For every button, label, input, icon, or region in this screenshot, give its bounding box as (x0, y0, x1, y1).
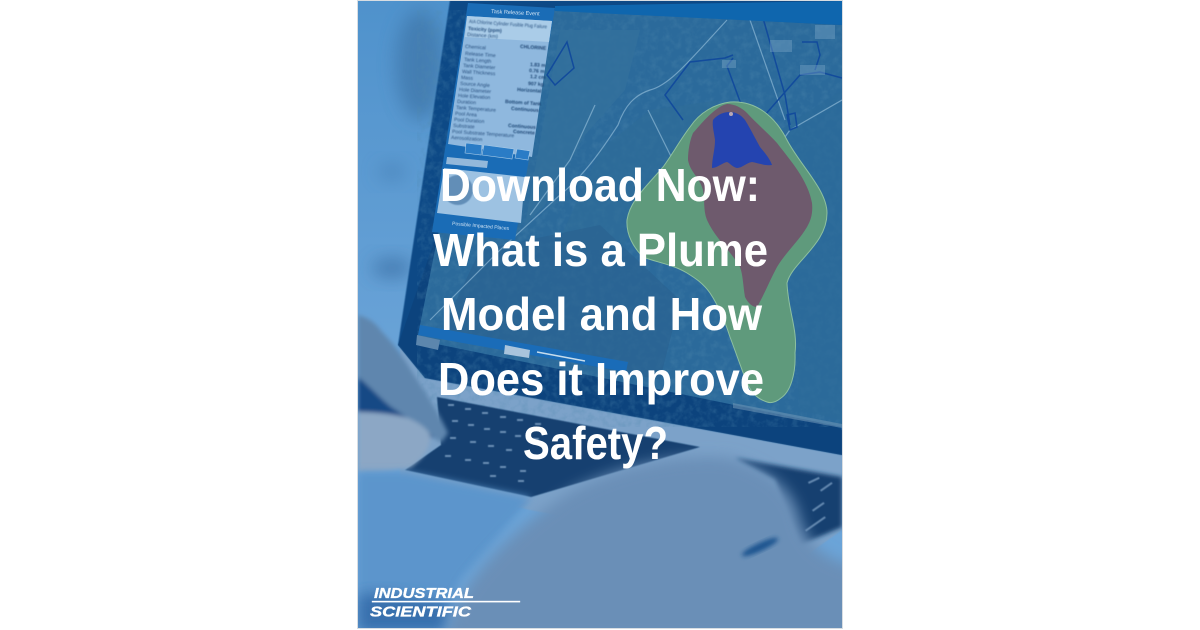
keyboard left keys (445, 404, 541, 482)
plume: outer green zone (627, 102, 827, 403)
blurred background (358, 1, 842, 628)
map (417, 10, 842, 427)
compass box (437, 168, 525, 223)
map attribution strip (733, 403, 842, 428)
plume: inner blue zone (712, 112, 772, 168)
panel table text: Wall Thickness (462, 69, 496, 77)
panel table text: Tank Temperature (456, 105, 496, 114)
panel table text: Pool Area (455, 111, 477, 119)
panel table text: Horizontal (517, 87, 542, 95)
panel table text: Toxicity (ppm) (468, 26, 502, 34)
laptop body (400, 345, 842, 560)
panel table text: Pool Substrate Temperature (452, 129, 515, 139)
logo: Industrial Scientific: SCIENTIFIC (370, 604, 472, 620)
panel table text: Release Time (465, 51, 496, 59)
keyboard right (735, 458, 842, 545)
logo: Industrial Scientific: INDUSTRIAL (374, 585, 474, 602)
title: Does it Improve (438, 353, 764, 405)
panel table text: Aerosolization (451, 135, 483, 143)
desk surface (358, 468, 532, 606)
side panel: task release event: Possible Impacted Places (452, 221, 510, 232)
panel table text: Distance (km) (467, 32, 498, 40)
panel table text: Continuous (511, 106, 539, 114)
laptop screen (416, 1, 842, 428)
panel table text: Substrate (453, 123, 475, 131)
side panel: task release event (432, 3, 555, 240)
plume: middle brown zone (688, 104, 812, 307)
map toolbar (416, 325, 628, 372)
map buildings (722, 25, 835, 75)
blurred right hand (445, 457, 860, 630)
lower finger (358, 412, 430, 472)
panel table text: Concrete (513, 129, 535, 137)
panel table text: Continuous (508, 123, 536, 131)
panel table text: 1.2 cm (530, 74, 546, 81)
panel header: Task Release Event (491, 9, 540, 18)
shadow between fingers (358, 376, 434, 438)
panel table text (451, 19, 547, 143)
map roads (430, 20, 842, 350)
panel table text: 907 kg (528, 81, 544, 88)
title: Download Now: (440, 159, 760, 211)
panel buttons (465, 143, 530, 160)
panel table text: Source Angle (460, 81, 490, 89)
title: Model and How (441, 288, 762, 340)
panel table text: Chemical (465, 44, 486, 51)
title: What is a Plume (433, 224, 768, 276)
panel table text: Bottom of Tank (505, 99, 542, 108)
panel table text: Pool Duration (454, 117, 485, 125)
panel table text: Tank Length (464, 57, 492, 65)
panel table text: AIA Chlorine Cylinder Fusible Plug Failure (469, 19, 547, 30)
panel table text: 1.83 m (530, 62, 546, 69)
panel table text: Duration (457, 99, 476, 106)
title (433, 159, 768, 469)
panel table text: CHLORINE (520, 44, 547, 52)
panel table background (448, 16, 552, 157)
panel table text: Hole Diameter (459, 87, 491, 95)
map boundaries (547, 18, 842, 130)
keyboard left (405, 397, 700, 497)
top toolbar (555, 1, 842, 25)
upper finger (358, 315, 448, 443)
panel table text: 0.76 m (529, 68, 545, 75)
panel table text: Mass (461, 75, 474, 82)
logo: Industrial Scientific (370, 585, 520, 620)
page frame (357, 0, 843, 629)
keyboard right keys (805, 477, 833, 532)
title: Safety? (523, 417, 668, 469)
cover photo (358, 0, 860, 630)
left hand (358, 315, 448, 472)
dropdown (446, 157, 488, 168)
map fields (525, 30, 640, 225)
panel table text: Hole Elevation (458, 93, 491, 101)
panel table text: Tank Diameter (463, 63, 496, 71)
laptop screen bezel (398, 0, 842, 455)
